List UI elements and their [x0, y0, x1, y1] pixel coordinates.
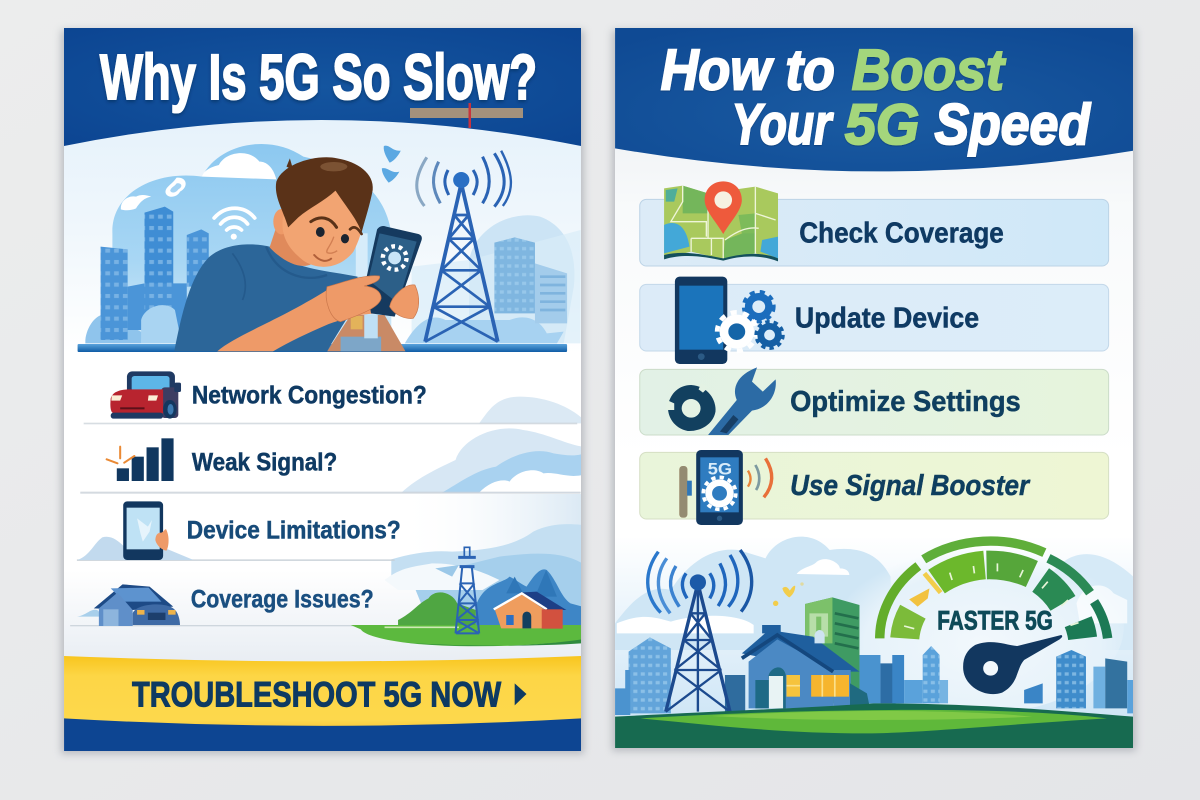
label: weak signal: Weak Signal?: [192, 449, 337, 477]
sky and clouds backdrop: [85, 144, 581, 343]
icon: cell tower: [648, 550, 752, 712]
label: faster 5G: FASTER 5G: [937, 605, 1053, 635]
icon: map with pin: [664, 181, 778, 261]
row: coverage issues: [77, 584, 374, 626]
row: update device: [640, 277, 1109, 364]
header banner: right: [615, 28, 1133, 171]
header banner: left: [64, 28, 581, 146]
panel: why is 5G so slow: [64, 28, 582, 752]
panel: how to boost your 5G speed: [615, 28, 1134, 749]
icon: wifi: [214, 208, 255, 240]
label: optimize settings: Optimize Settings: [790, 386, 1021, 418]
title: how to boost your 5G speed: [661, 39, 1092, 157]
gauge: faster 5G speedometer: [880, 541, 1108, 638]
man: brown box under phone: [327, 315, 405, 351]
label: update device: Update Device: [795, 303, 979, 334]
gauge needle: [963, 635, 1062, 694]
row: use signal booster: [640, 450, 1109, 525]
skyline: [615, 637, 1133, 715]
man: face: [273, 157, 373, 267]
row: device limitations: [78, 501, 401, 560]
ground line: [78, 344, 567, 352]
city buildings: [101, 207, 567, 343]
illustration: frustrated man with phone and tower: [78, 144, 581, 352]
icon: red car: [110, 371, 181, 419]
icon: small hearts: [773, 582, 804, 606]
icon: phone with gears: [675, 277, 783, 364]
row: weak signal: [107, 438, 337, 481]
icon: phone in hand: [78, 501, 194, 560]
decorative bar under title: [410, 103, 523, 128]
row: network congestion: [110, 371, 427, 419]
list: causes of slow 5G: [70, 371, 582, 646]
label: coverage issues: Coverage Issues?: [191, 585, 374, 613]
label: device limitations: Device Limitations?: [187, 517, 401, 545]
sky and clouds: [615, 537, 1134, 717]
icon: cell tower: [417, 151, 511, 342]
title: how to boost your 5G speed: Speed: [935, 93, 1092, 157]
green building: [805, 597, 859, 703]
illustration: rural tower and house: [351, 547, 582, 646]
label: check coverage: Check Coverage: [799, 218, 1004, 250]
man: shirt: [174, 244, 357, 351]
title: why is 5G so slow: Why Is 5G So Slow?: [100, 41, 537, 113]
man: hands: [326, 276, 419, 322]
title: how to boost your 5G speed: 5G: [845, 93, 919, 157]
title: how to boost your 5G speed: Boost: [852, 39, 1006, 102]
row: optimize settings: [640, 367, 1109, 435]
row backgrounds and clouds: [385, 397, 582, 630]
icon: arrow: [515, 683, 527, 705]
grass: [615, 703, 1133, 749]
icon: gear and wrench: [667, 367, 776, 435]
title: how to boost your 5G speed: Your: [732, 93, 834, 157]
label: use signal booster: Use Signal Booster: [790, 470, 1031, 502]
illustration: faster 5G scene: [615, 537, 1134, 749]
row: check coverage: [640, 181, 1109, 266]
title: how to boost your 5G speed: How to: [661, 39, 835, 102]
man: neck and arm: [270, 230, 311, 266]
label: troubleshoot 5G now: TROUBLESHOOT 5G NOW: [132, 675, 501, 715]
icon: 5G phone with signal booster: 5G: [708, 459, 732, 478]
call to action banner: [64, 656, 582, 752]
icon: 5G phone with signal booster: [679, 450, 772, 525]
icon: phone with loading spinner: [366, 226, 422, 317]
label: network congestion: Network Congestion?: [192, 381, 427, 409]
dividers: [70, 423, 581, 626]
icon: house and car: [77, 584, 180, 626]
house: [742, 625, 870, 710]
icon: signal bars: [107, 438, 174, 481]
icon: hearts: [382, 146, 401, 183]
